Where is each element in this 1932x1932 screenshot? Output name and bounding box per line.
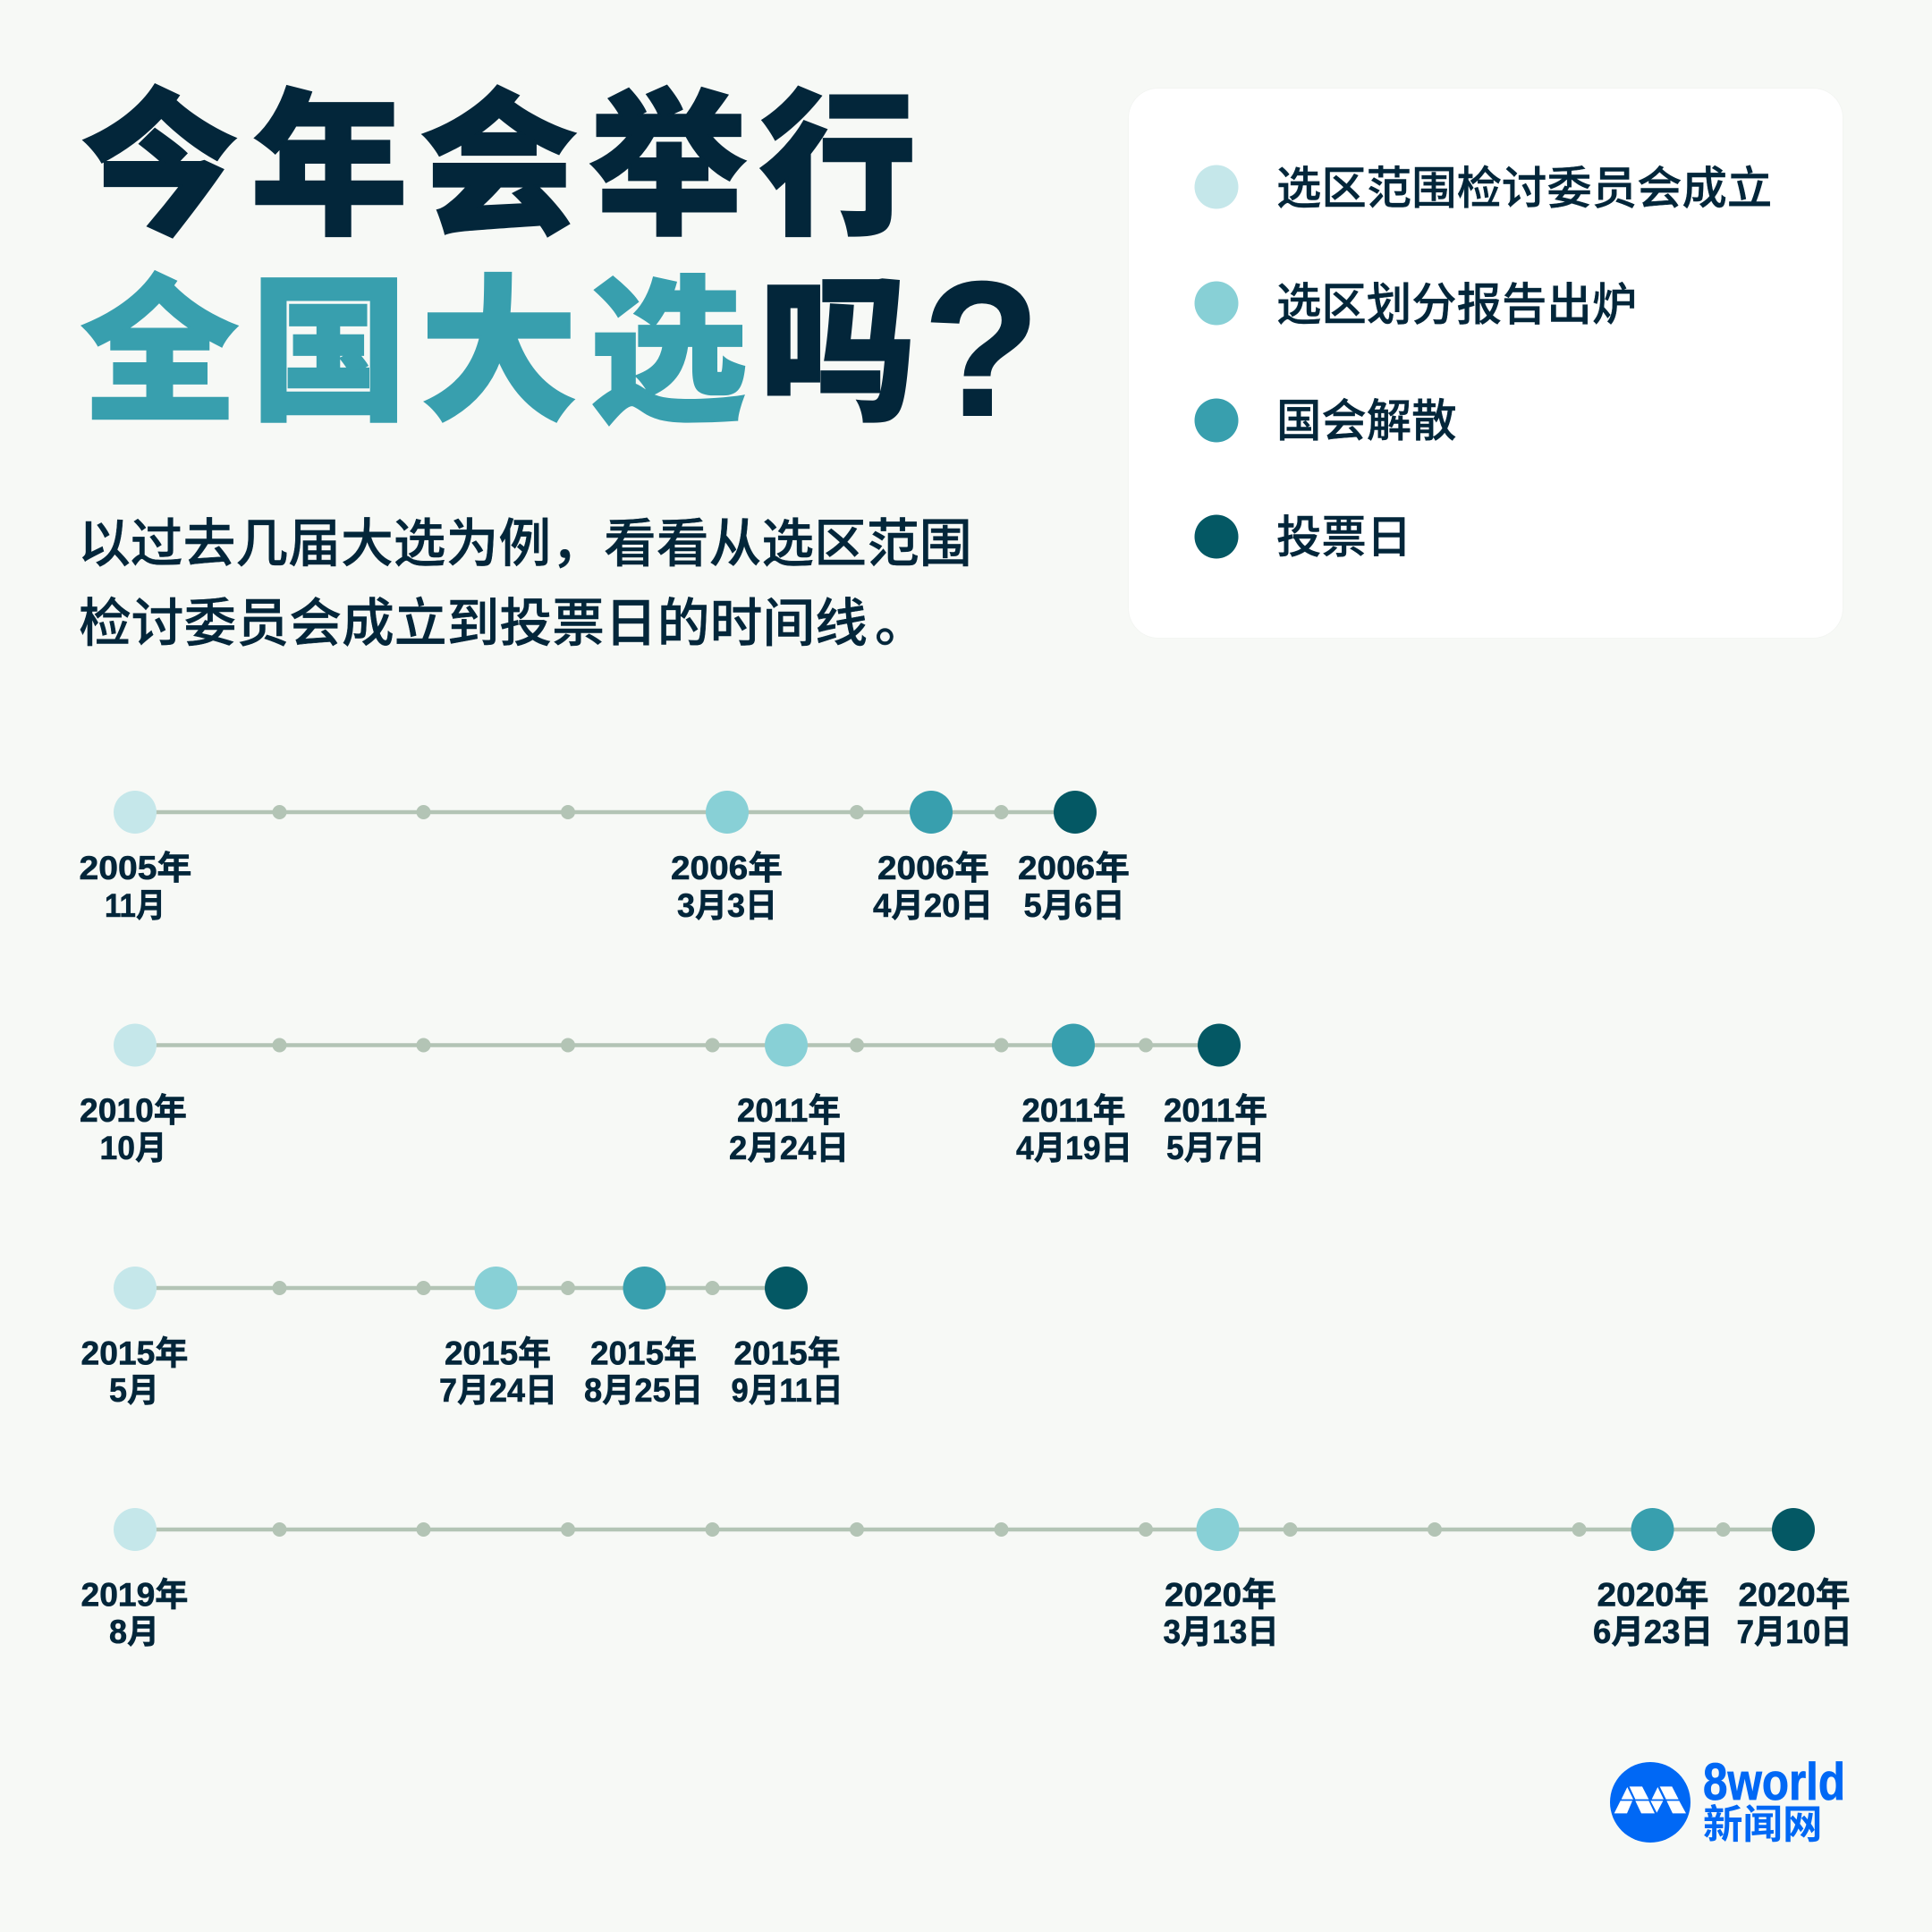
- node: 2019 Aug: 2019年: [80, 1576, 188, 1614]
- node: 2015 May: 5月: [109, 1372, 159, 1409]
- timeline: 2019-2020: [80, 1508, 1852, 1650]
- legend item: report released: 选区划分报告出炉: [1276, 268, 1637, 334]
- node: 2011 May 7: 5月7日: [1166, 1130, 1265, 1166]
- logo wordmark: 8world: [1703, 1753, 1845, 1811]
- logo: 8world: [1610, 1753, 1845, 1850]
- subtitle: 以过去几届大选为例，看看从选区范围: [78, 501, 972, 577]
- node: 2011 May 7: [1164, 1023, 1267, 1166]
- subtitle: 检讨委员会成立到投票日的时间线。: [79, 580, 928, 657]
- timeline: 2015: [80, 1267, 843, 1409]
- node: 2020 Mar 13: [1163, 1508, 1279, 1650]
- node: 2010 Oct: 10月: [100, 1130, 166, 1166]
- title line 2: 全国大选: [81, 226, 759, 453]
- node: 2010 Oct: 2010年: [80, 1092, 187, 1129]
- title line 2: [81, 226, 1040, 456]
- node: 2020 Jul 10: [1737, 1508, 1852, 1650]
- title: [81, 40, 1040, 456]
- node: 2006 Apr 20: [873, 791, 993, 924]
- node: 2005 Nov: 11月: [105, 887, 165, 924]
- node: 2015 Sep 11: [732, 1267, 843, 1409]
- node: 2006 Mar 3: 2006年: [671, 850, 783, 886]
- legend item: polling day: 投票日: [1276, 501, 1411, 566]
- logo wordmark: 新闻网: [1703, 1792, 1823, 1850]
- node: 2006 May 6: 2006年: [1018, 850, 1130, 886]
- node: 2020 Jul 10: 7月10日: [1737, 1614, 1852, 1650]
- node: 2015 May: 2015年: [80, 1335, 188, 1372]
- node: 2015 Sep 11: 9月11日: [732, 1372, 843, 1409]
- node: 2011 May 7: 2011年: [1164, 1092, 1267, 1129]
- node: 2006 Apr 20: 2006年: [877, 850, 989, 886]
- logo wordmark: [1703, 1753, 1845, 1850]
- subtitle: [78, 501, 972, 657]
- node: 2015 Jul 24: 7月24日: [439, 1372, 557, 1409]
- node: 2011 Feb 24: 2月24日: [729, 1130, 849, 1166]
- node: 2011 Apr 19: [1016, 1023, 1132, 1166]
- title line 1: 今年会举行: [81, 40, 929, 267]
- title line 2: 吗: [759, 226, 929, 453]
- node: 2006 May 6: [1018, 791, 1130, 924]
- legend item: polling day: [1195, 501, 1411, 566]
- node: 2020 Mar 13: 3月13日: [1163, 1614, 1279, 1650]
- panel: legend: [1128, 88, 1843, 639]
- node: 2019 Aug: [80, 1508, 188, 1650]
- node: 2020 Mar 13: 2020年: [1165, 1576, 1276, 1614]
- node: 2020 Jul 10: 2020年: [1739, 1576, 1850, 1614]
- node: 2006 Mar 3: [671, 791, 783, 924]
- legend item: committee formed: 选区范围检讨委员会成立: [1276, 152, 1772, 217]
- node: 2010 Oct: [80, 1023, 187, 1166]
- node: 2011 Apr 19: 2011年: [1021, 1092, 1125, 1129]
- legend item: parliament dissolved: 国会解散: [1276, 385, 1457, 450]
- node: 2006 Mar 3: 3月3日: [677, 887, 777, 924]
- node: 2015 Aug 25: 2015年: [590, 1335, 697, 1372]
- timeline: 2005-2006: [79, 791, 1130, 924]
- node: 2015 Jul 24: [439, 1267, 557, 1409]
- node: 2015 Aug 25: 8月25日: [584, 1372, 703, 1409]
- timeline: 2010-2011: [80, 1023, 1267, 1166]
- node: 2011 Feb 24: 2011年: [737, 1092, 841, 1129]
- node: 2015 Jul 24: 2015年: [445, 1335, 551, 1372]
- node: 2006 Apr 20: 4月20日: [873, 887, 993, 924]
- node: 2020 Jun 23: 6月23日: [1593, 1614, 1713, 1650]
- node: 2015 May: [80, 1267, 188, 1409]
- node: 2020 Jun 23: [1593, 1508, 1713, 1650]
- node: 2015 Sep 11: 2015年: [733, 1335, 841, 1372]
- icon: logo mark: [1610, 1762, 1690, 1843]
- node: 2015 Aug 25: [584, 1267, 703, 1409]
- node: 2011 Apr 19: 4月19日: [1016, 1130, 1132, 1166]
- node: 2020 Jun 23: 2020年: [1597, 1576, 1708, 1614]
- node: 2011 Feb 24: [729, 1023, 849, 1166]
- title line 2: ?: [923, 242, 1040, 456]
- legend item: parliament dissolved: [1195, 385, 1457, 450]
- node: 2005 Nov: 2005年: [79, 850, 191, 886]
- node: 2006 May 6: 5月6日: [1023, 887, 1125, 924]
- node: 2019 Aug: 8月: [109, 1614, 159, 1650]
- node: 2005 Nov: [79, 791, 191, 924]
